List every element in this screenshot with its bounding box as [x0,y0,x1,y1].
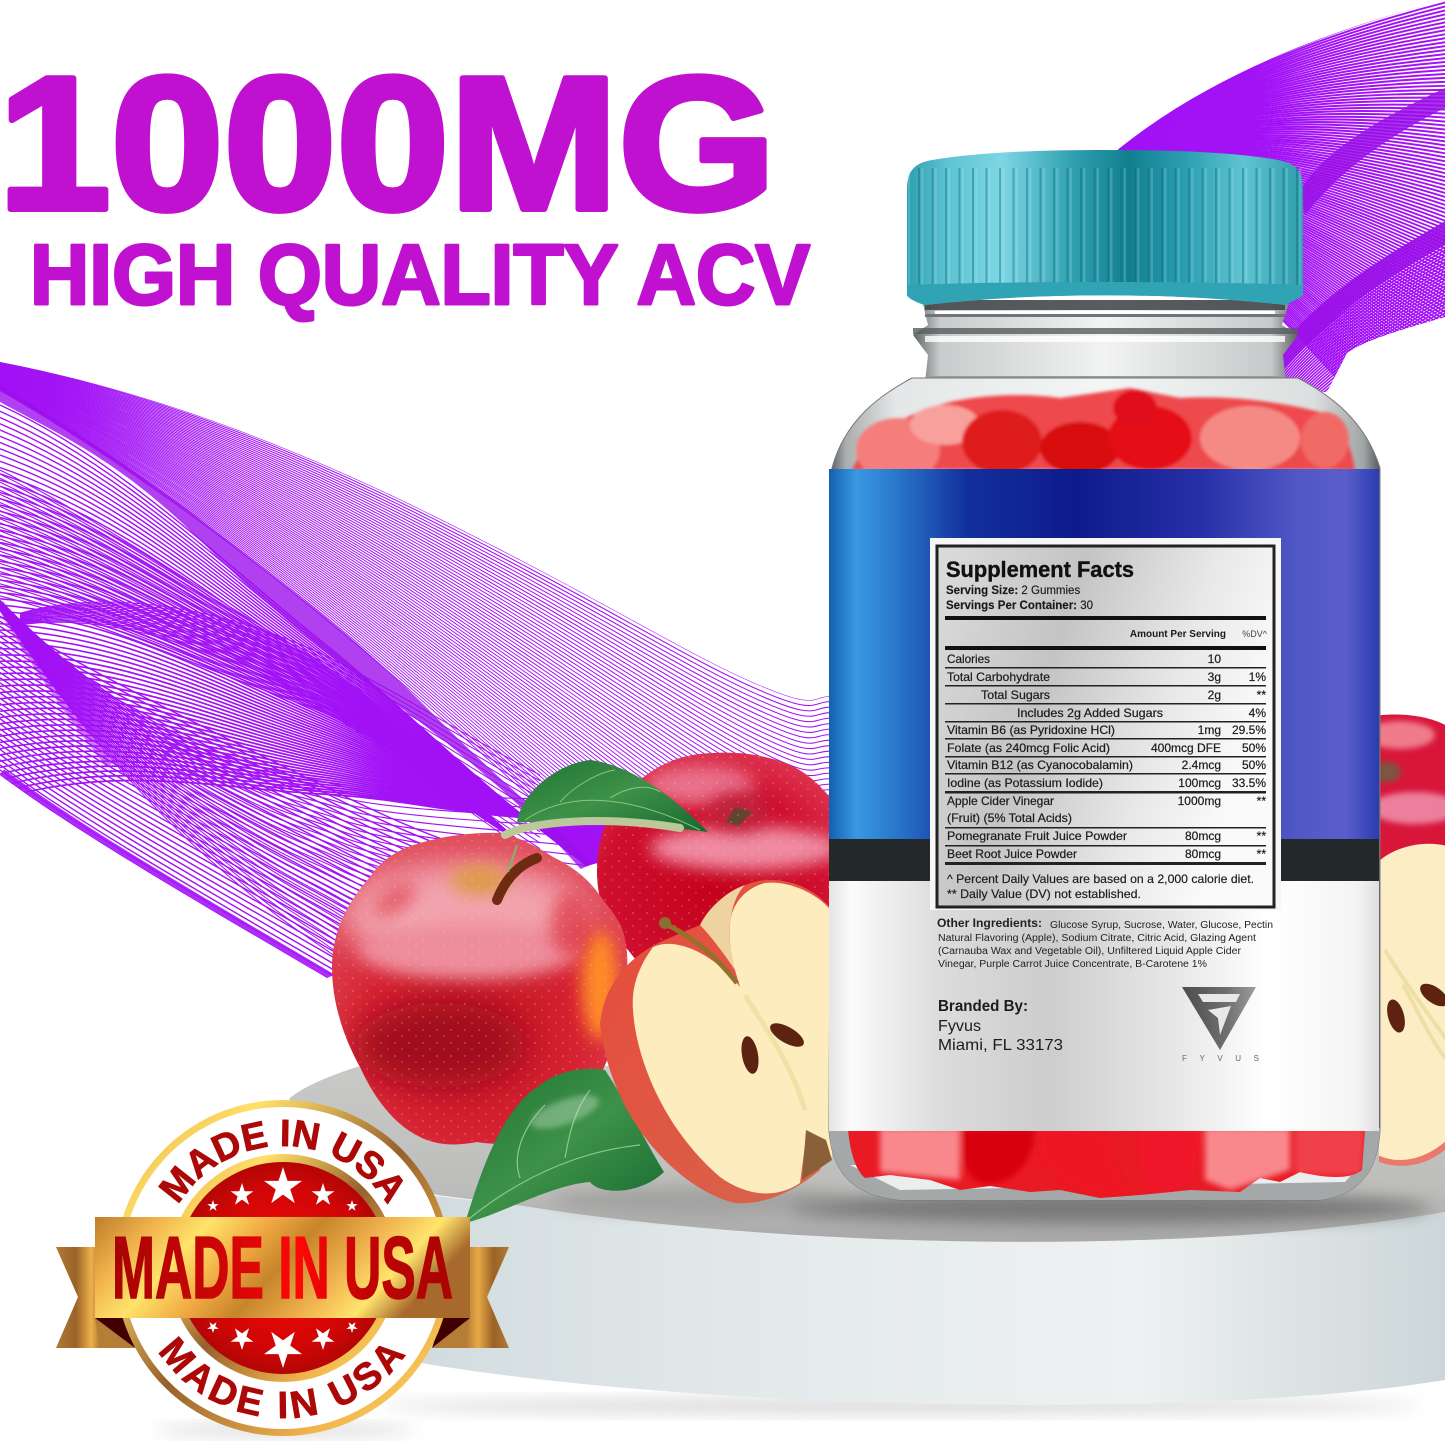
apples group [325,745,840,1223]
icon: Fyvus logo: FYVUS [1182,1054,1259,1063]
other ingredients: Natural Flavoring (Apple), Sodium Citrate, Citric Acid, Glazing Agent [938,933,1256,944]
nutrient rows: 4% [1249,706,1266,720]
branded by: Miami, FL 33173 [938,1037,1063,1054]
ribbon banner [95,1217,470,1318]
arc text: MADE IN USA [158,1336,406,1418]
serving info: Servings Per Container: 30 [946,600,1093,612]
gummies bottom [845,1128,1370,1200]
title: 1000MG: 1000MG [0,38,776,250]
apple cut stem [663,923,737,983]
branded by: Fyvus [938,1018,981,1035]
apple seeds [767,1019,807,1051]
lower leaf [465,1069,664,1223]
supplement bottle [829,150,1381,1202]
supplement facts panel [930,538,1281,910]
nutrient rows: Calories [947,652,990,666]
nutrient rows: 80mcg [1185,829,1221,843]
badge shadow [155,1424,415,1436]
nutrient rows: ** [1257,847,1266,861]
stars [207,1167,358,1368]
banner text: MADE IN USA [112,1218,453,1317]
nutrient rows: Total Sugars [981,688,1050,702]
table header [945,616,1268,650]
badge: made in USA [56,1100,509,1441]
gummies top [850,386,1357,469]
nutrient rows: 3g [1208,670,1221,684]
nutrient rows: Includes 2g Added Sugars [1017,706,1163,720]
whole apple right [1380,714,1445,860]
footnotes: ** Daily Value (DV) not established. [947,887,1141,901]
footnotes [947,872,1254,901]
table rules [945,667,1266,865]
ribbon tails [56,1247,509,1348]
table header: %DV^ [1242,629,1268,639]
nutrient rows: 10 [1208,652,1221,666]
nutrient rows: 1% [1249,670,1266,684]
cut apple [600,880,832,1203]
nutrient rows: Iodine (as Potassium Iodide) [947,776,1103,790]
nutrient rows: 400mcg DFE [1151,741,1221,755]
seal rings [115,1100,451,1436]
apple flesh [633,883,832,1193]
glass body [829,378,1380,1200]
nutrient rows: Folate (as 240mcg Folic Acid) [947,741,1110,755]
back apple [596,752,829,958]
other ingredients: Other Ingredients: [937,916,1042,930]
nutrient rows: Vitamin B6 (as Pyridoxine HCl) [947,723,1115,737]
nutrient rows: 29.5% [1232,723,1266,737]
nutrient rows: Pomegranate Fruit Juice Powder [947,829,1127,843]
label white lower section [829,881,1379,1131]
nutrient rows: 33.5% [1232,776,1266,790]
nutrient rows: Total Carbohydrate [947,670,1050,684]
label blue band [829,469,1379,839]
nutrient rows: 1000mg [1178,794,1221,808]
table header: Amount Per Serving [1130,629,1226,640]
arc text: MADE IN USA [158,1120,404,1205]
branded by: Branded By: [938,998,1028,1015]
nutrient rows: 1mg [1198,723,1221,737]
nutrient rows [947,652,1266,861]
icon: Fyvus logo [1182,987,1259,1063]
nutrient rows: 50% [1242,741,1266,755]
nutrient rows: Beet Root Juice Powder [947,847,1077,861]
arc text [158,1120,406,1418]
footnotes: ^ Percent Daily Values are based on a 2,000 calorie diet. [947,872,1254,886]
other ingredients: Glucose Syrup, Sucrose, Water, Glucose, Pectin [1050,920,1273,931]
nutrient rows: 2.4mcg [1182,758,1221,772]
nutrient rows: (Fruit) (5% Total Acids) [947,811,1072,825]
purple line wave: top right [1117,2,1445,392]
nutrient rows: 50% [1242,758,1266,772]
purple line wave: left [0,362,829,978]
panel title: Supplement Facts [946,557,1134,582]
branded by [938,998,1063,1054]
big apple [325,830,635,1150]
nutrient rows: 80mcg [1185,847,1221,861]
other ingredients: Vinegar, Purple Carrot Juice Concentrate, B-Carotene 1% [938,959,1207,970]
nutrient rows: ** [1257,794,1266,808]
nutrient rows: 100mcg [1178,776,1221,790]
glass neck [913,300,1298,390]
nutrient rows: Vitamin B12 (as Cyanocobalamin) [947,758,1133,772]
nutrient rows: Apple Cider Vinegar [947,794,1054,808]
nutrient rows: ** [1257,829,1266,843]
label dark stripe [829,839,1379,881]
platform podium [289,1066,1445,1414]
serving info [946,585,1093,612]
other ingredients: (Carnauba Wax and Vegetable Oil), Unfiltered Liquid Apple Cider [938,946,1242,957]
apple stem [497,858,537,900]
glass base tint [829,1128,1381,1202]
serving info: Serving Size: 2 Gummies [946,585,1080,597]
nutrient rows: ** [1257,688,1266,702]
bottle cap [907,150,1303,305]
other ingredients [937,916,1273,970]
subtitle: high quality ACV: HIGH QUALITY ACV [30,228,810,323]
cut apple right [1375,844,1445,1166]
nutrient rows: 2g [1208,688,1221,702]
apples behind bottle on right [1379,714,1445,1166]
top leaf [505,760,708,872]
